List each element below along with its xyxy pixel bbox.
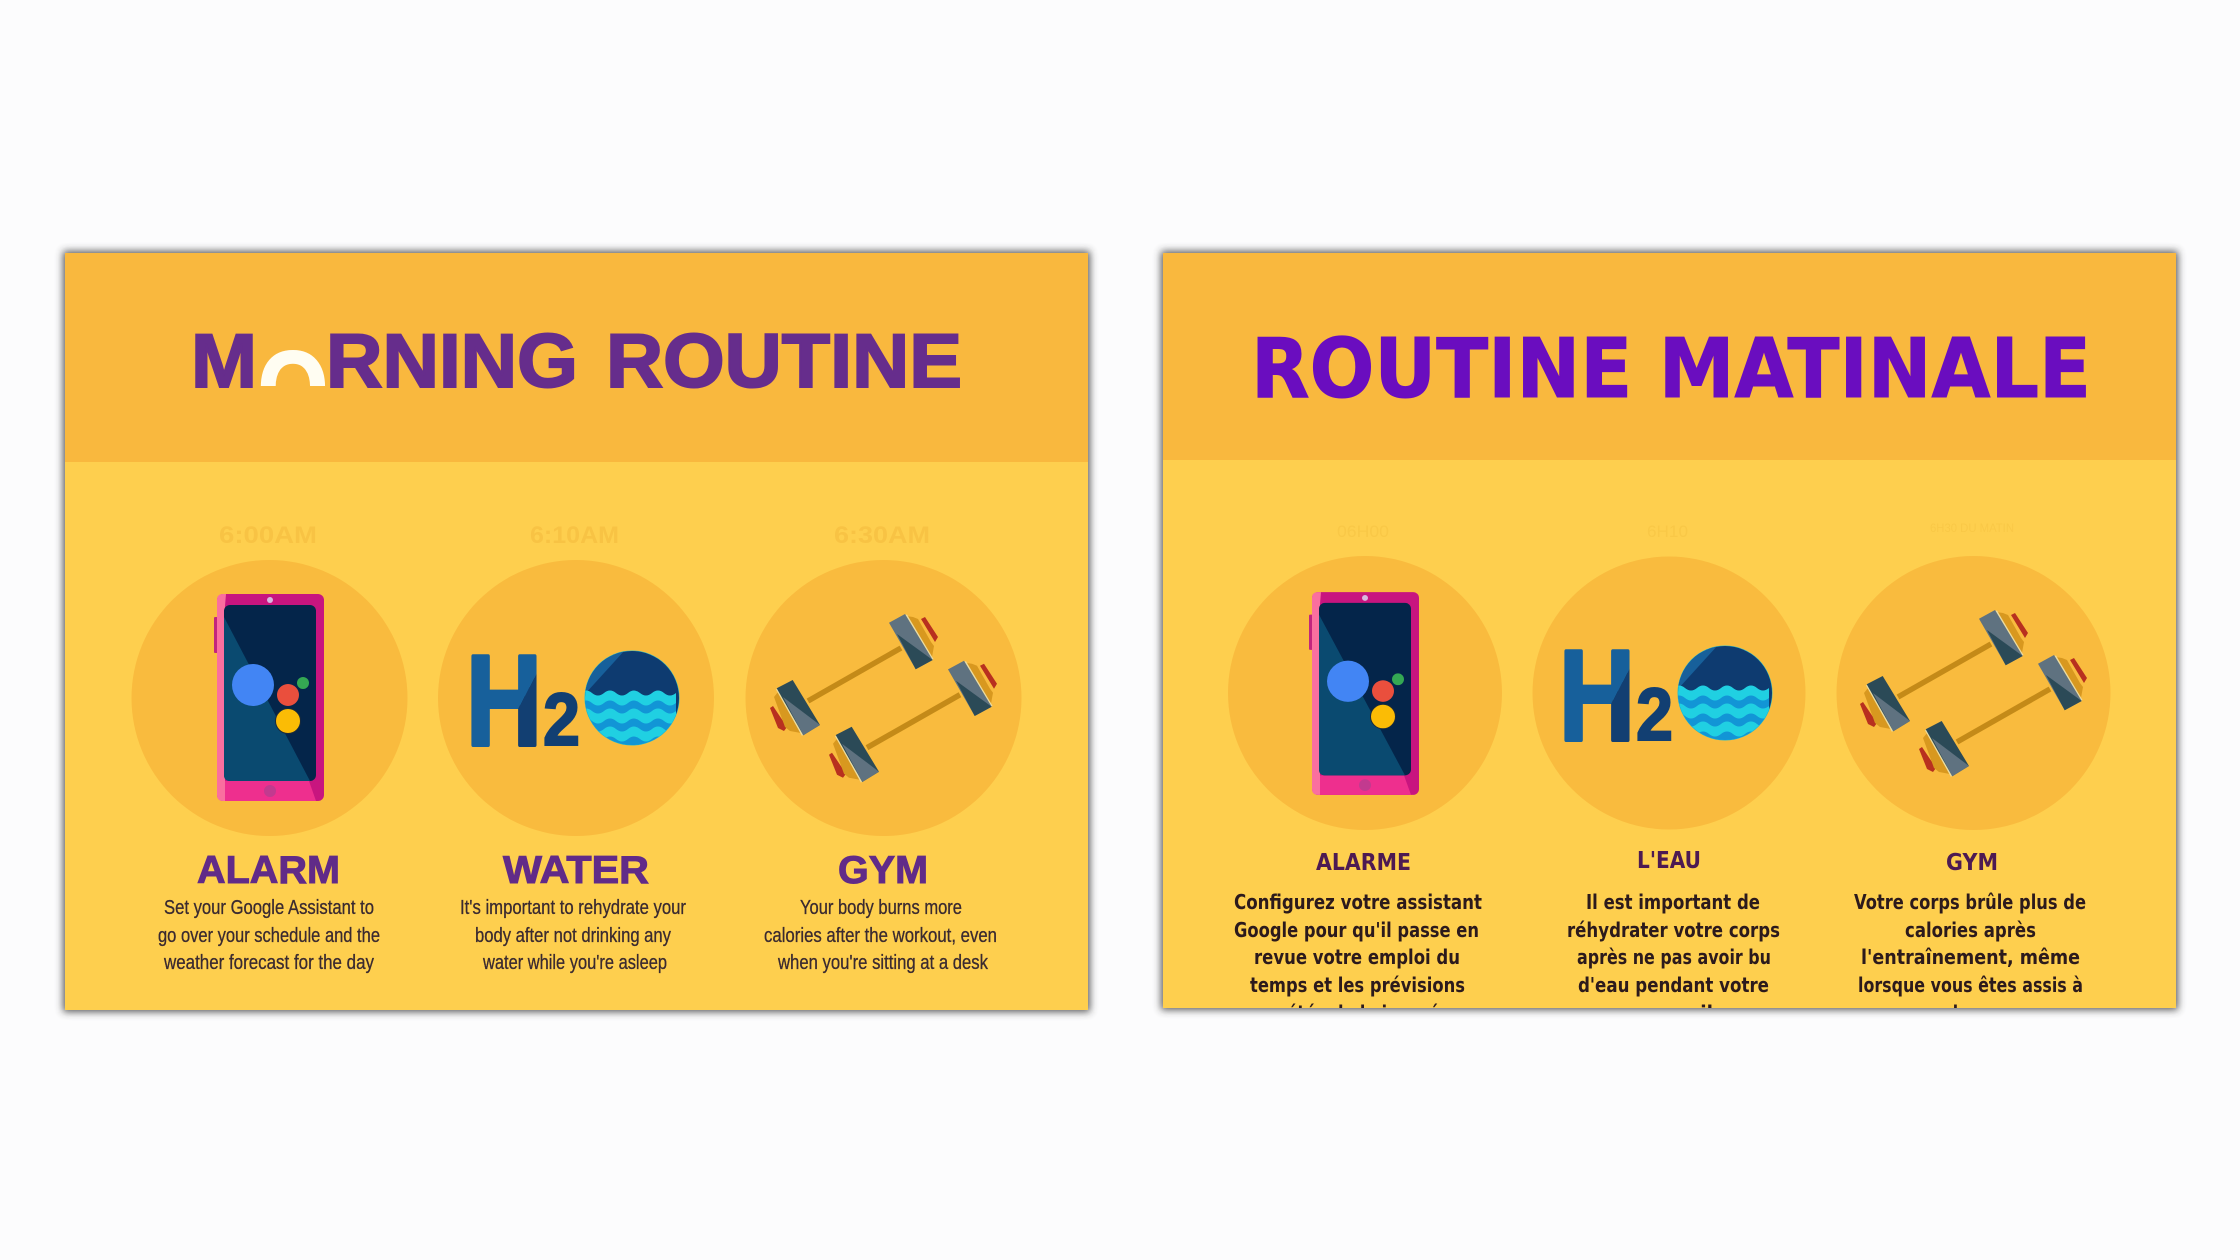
description: gym: un bureau (1925, 1001, 2015, 1025)
heading: Water: WATER (503, 849, 649, 892)
description: water: water while you're asleep (482, 952, 667, 974)
icon: H2O: 2 (1636, 673, 1673, 756)
icon circle (1836, 556, 2110, 830)
time: 6H30 du matin: 6H30 DU MATIN (1930, 521, 2014, 535)
description: gym (764, 897, 997, 974)
icon: H2O (1564, 646, 1772, 742)
icon: barbells (770, 614, 997, 783)
icon circle (132, 560, 408, 836)
panel body (1163, 253, 2176, 1008)
column: alarme (1228, 556, 1502, 1008)
heading: L'eau: L'EAU (1637, 848, 1701, 874)
icon: H2O (466, 629, 684, 773)
title: Morning Routine (195, 332, 960, 388)
description: alarm: go over your schedule and the (158, 925, 380, 947)
description: l'eau: d'eau pendant votre (1578, 973, 1769, 997)
column: water (438, 522, 714, 974)
description: alarme: revue votre emploi du (1254, 945, 1460, 969)
icon: H2O: 2 (543, 678, 580, 761)
panel: Morning Routine (English) (63, 251, 1090, 1012)
title: Morning Routine: ROUTINE (606, 319, 962, 404)
panel body (65, 253, 1088, 1010)
description: l'eau: après ne pas avoir bu (1577, 945, 1771, 969)
time: 06H00: 06H00 (1337, 522, 1389, 541)
description: water: It's important to rehydrate your (460, 897, 686, 919)
icon: H2O: H (466, 629, 542, 773)
description: alarme: Google pour qu'il passe en (1234, 918, 1479, 942)
heading: Alarm: ALARM (197, 849, 340, 892)
icon: barbells (1860, 610, 2087, 777)
description: alarme (1234, 894, 1482, 1008)
description: alarm (158, 897, 380, 974)
icon circle (1532, 556, 1806, 830)
column: l'eau (1532, 556, 1806, 1008)
icon: phone with Google Assistant (214, 594, 324, 801)
description: l'eau: sommeil (1625, 1001, 1713, 1025)
description: alarme: météo de la journée (1270, 1001, 1450, 1025)
description: gym: calories après (1905, 918, 2036, 942)
icon circle (746, 560, 1022, 836)
description: alarm: Set your Google Assistant to (164, 897, 374, 919)
description: l'eau (1568, 894, 1780, 1008)
time: 6:00AM: 6:00AM (219, 522, 317, 549)
icon: phone with Google Assistant (1309, 592, 1419, 795)
description: l'eau: réhydrater votre corps (1567, 918, 1780, 942)
description: alarm: weather forecast for the day (163, 952, 374, 974)
description: gym: when you're sitting at a desk (777, 952, 989, 974)
time: 6H10: 6H10 (1647, 522, 1688, 541)
title: Morning Routine: O (258, 330, 328, 445)
column: gym (1836, 556, 2110, 1008)
description: alarme: temps et les prévisions (1250, 973, 1465, 997)
time: 6:30AM: 6:30AM (834, 522, 930, 549)
column: alarm (132, 522, 408, 974)
title: Morning Routine: M (191, 319, 257, 404)
description: water: body after not drinking any (475, 925, 671, 947)
icon: H2O: H (1559, 624, 1635, 768)
heading: Gym: GYM (1946, 850, 1998, 876)
title: Morning Routine: RNING (326, 319, 578, 404)
header band (65, 253, 1088, 462)
description: alarme: Configurez votre assistant (1234, 890, 1482, 914)
icon circle (438, 560, 714, 836)
heading: Alarme: ALARME (1316, 850, 1411, 876)
description: gym: lorsque vous êtes assis à (1858, 973, 2083, 997)
description: gym (1854, 892, 2086, 1008)
time: 6:10AM: 6:10AM (530, 522, 619, 549)
description: water (460, 897, 686, 974)
icon circle (1228, 556, 1502, 830)
description: gym: calories after the workout, even (764, 925, 997, 947)
heading: Gym: GYM (838, 849, 928, 892)
column: gym (746, 522, 1022, 974)
description: l'eau: Il est important de (1586, 890, 1760, 914)
description: gym: Votre corps brûle plus de (1854, 890, 2086, 914)
panel: Routine Matinale (French) (1161, 251, 2178, 1025)
header band (1163, 253, 2176, 460)
title: Routine Matinale: ROUTINE MATINALE (1251, 322, 2091, 417)
description: gym: Your body burns more (800, 897, 962, 919)
description: gym: l'entraînement, même (1861, 945, 2080, 969)
